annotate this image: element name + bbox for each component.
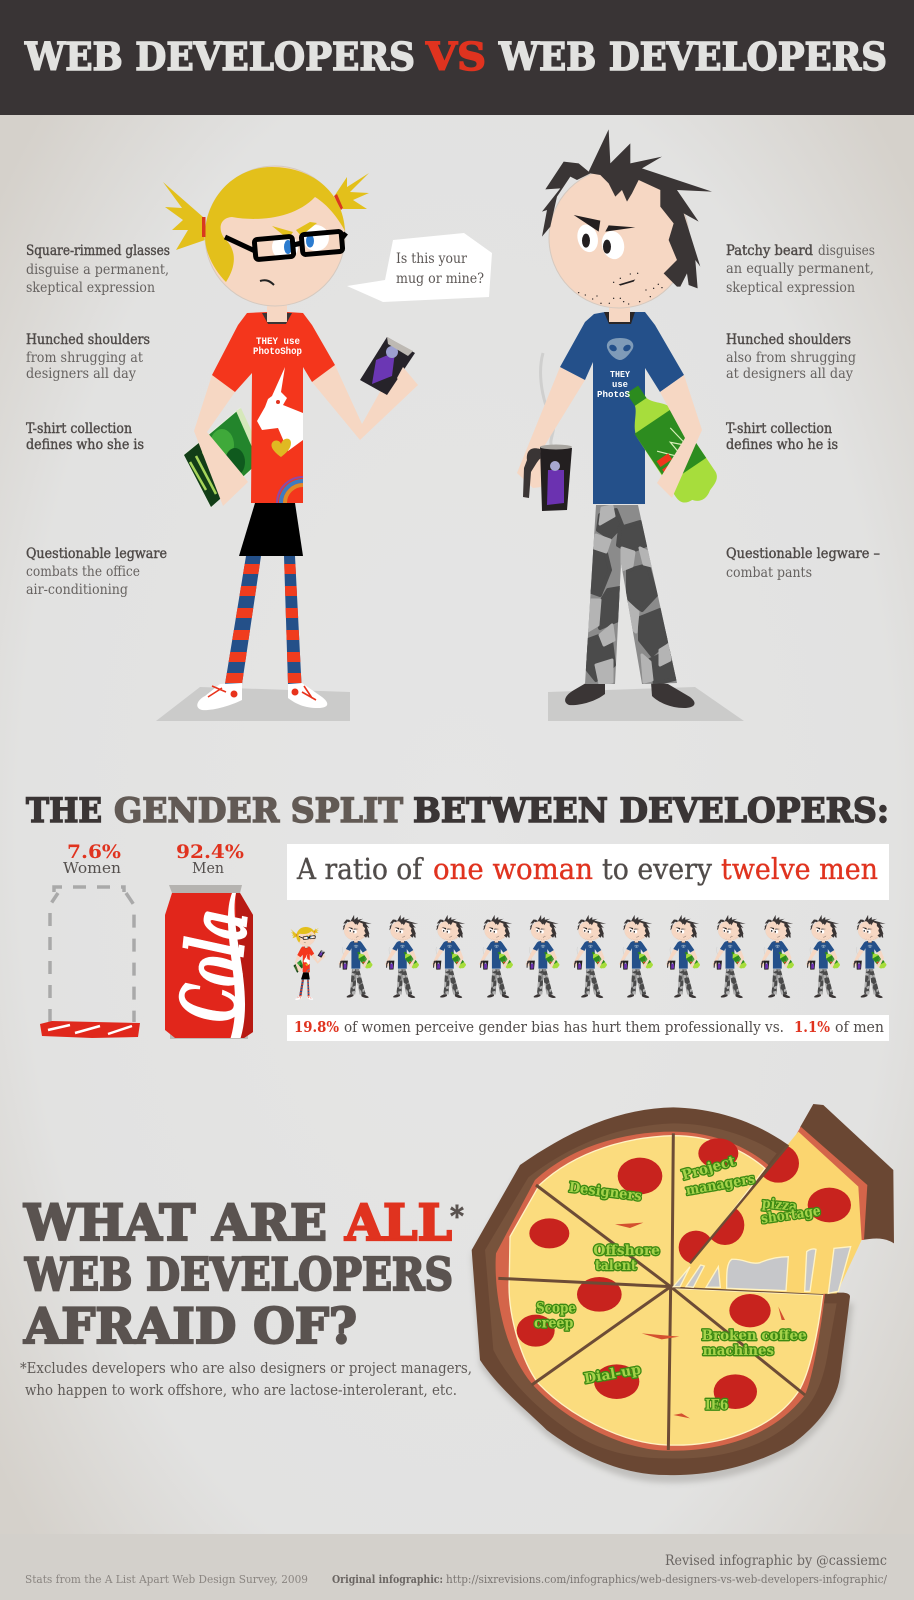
annotations: designer-like developer: from shrugging at	[26, 350, 144, 366]
gender bias stat	[287, 1015, 889, 1041]
pepperoni on pizza	[517, 1138, 771, 1409]
section heading: gender split	[26, 791, 889, 831]
women percentage: 7.6%	[67, 841, 121, 863]
girl left arm	[194, 375, 248, 506]
boy steam	[541, 353, 554, 447]
pictogram row: twelve men	[338, 915, 888, 998]
pizza labels: Project	[680, 1153, 738, 1184]
boy neck	[604, 300, 635, 324]
bubble text: Is this your	[396, 251, 467, 267]
pizza chart	[472, 1104, 894, 1483]
footnote: *Excludes developers who are also designers or project managers,	[20, 1361, 472, 1377]
alien on shirt	[607, 338, 633, 360]
annotations: designer-like developer: defines who she is	[26, 437, 144, 453]
boy shirt text	[597, 369, 630, 400]
annotations: developer: Questionable legware –	[726, 546, 880, 562]
section heading: fears	[23, 1193, 464, 1355]
ratio banner	[287, 844, 889, 900]
bubble text: mug or mine?	[396, 271, 484, 287]
pizza labels: creep	[534, 1315, 574, 1331]
pizza shadow	[472, 1113, 853, 1483]
pulled slice sauce	[796, 1127, 867, 1240]
annotations: designer-like developer: Square-rimmed glasses	[26, 243, 170, 259]
annotations: developer: disguises	[818, 243, 875, 259]
floor shadow left	[156, 687, 350, 721]
speech bubble	[347, 233, 492, 302]
girl eyes	[272, 222, 329, 260]
ratio banner: A ratio of	[296, 852, 424, 886]
women percentage	[63, 841, 121, 877]
pizza labels: Broken coffee	[702, 1328, 807, 1344]
gold heart	[271, 439, 291, 457]
girl legs	[220, 556, 310, 686]
character: girl developer	[163, 166, 418, 710]
annotations: developer: at designers all day	[726, 366, 853, 382]
boy eyebrows	[574, 215, 635, 232]
slice pepperoni	[706, 1144, 851, 1245]
women percentage: Women	[63, 859, 121, 877]
girl shirt text	[253, 336, 302, 358]
girl glasses	[225, 231, 346, 260]
annotations: developer: defines who he is	[726, 437, 838, 453]
gender bias stat: of women perceive gender bias has hurt them professionally vs.	[344, 1018, 784, 1036]
men percentage	[176, 841, 244, 877]
annotations: designer-like developer: skeptical expression	[26, 280, 155, 296]
girl right arm	[312, 365, 418, 440]
pizza cuts	[498, 1133, 823, 1450]
floor shadow right	[548, 687, 744, 721]
boy shirt text: PhotoS	[597, 389, 630, 400]
pizza sauce	[496, 1132, 825, 1451]
pizza labels: shortage	[760, 1203, 822, 1227]
unicorn on shirt	[257, 367, 303, 451]
annotations: designer-like developer: designers all day	[26, 366, 136, 382]
cola can (men)	[165, 885, 253, 1039]
gender bias stat: of men	[835, 1018, 884, 1036]
section heading: fears: WHAT ARE	[23, 1193, 327, 1252]
girl book	[184, 408, 264, 507]
girl shirt text: THEY use	[256, 336, 300, 348]
boy camo pants	[580, 500, 680, 690]
pizza labels: Scope	[536, 1301, 576, 1317]
annotations: developer: skeptical expression	[726, 280, 855, 296]
footer	[0, 1534, 914, 1600]
annotations: designer-like developer: Hunched shoulders	[26, 332, 150, 348]
pizza labels	[534, 1153, 822, 1413]
character: male developer	[517, 129, 724, 708]
pulled slice crust	[800, 1104, 894, 1243]
annotations: developer: also from shrugging	[726, 350, 856, 366]
title	[24, 34, 887, 79]
title: WEB DEVELOPERS	[498, 34, 887, 79]
girl right shoe	[288, 683, 327, 708]
annotations: designer-like developer: Questionable legware	[26, 546, 167, 562]
annotations: developer: an equally permanent,	[726, 261, 874, 277]
girl face	[205, 166, 345, 306]
pizza labels: managers	[685, 1171, 756, 1199]
section heading: gender split: GENDER SPLIT	[114, 791, 403, 831]
slice edge	[690, 1145, 788, 1263]
title: WEB DEVELOPERS	[24, 34, 415, 79]
crushed can	[40, 1021, 140, 1038]
credit: revised: Revised infographic by @cassiemc	[665, 1553, 887, 1569]
pizza crust	[472, 1107, 850, 1475]
boy cup	[523, 444, 572, 511]
bubble text	[396, 251, 484, 287]
pizza cheese	[509, 1136, 823, 1445]
girl hair cap	[205, 167, 345, 282]
boy bottle	[612, 377, 724, 511]
boy t-shirt	[560, 312, 684, 504]
ratio banner: one woman	[433, 852, 593, 886]
footnote: who happen to work offshore, who are lactose-interolerant, etc.	[25, 1383, 457, 1399]
pizza labels: IE6	[705, 1397, 728, 1413]
annotations: developer: Hunched shoulders	[726, 332, 851, 348]
crust highlight	[485, 1123, 837, 1459]
section heading: fears: ALL	[344, 1193, 452, 1252]
girl mouth	[260, 280, 274, 285]
section heading: gender split: BETWEEN DEVELOPERS:	[413, 791, 889, 831]
pizza labels: Designers	[568, 1180, 643, 1205]
rainbow	[277, 477, 303, 503]
annotations: designer-like developer: combats the office	[26, 564, 140, 580]
boy shirt text: THEY	[610, 369, 630, 380]
boy eyes	[574, 222, 627, 262]
girl hair ties	[202, 194, 343, 237]
cheese strings gaps	[673, 1247, 851, 1293]
pizza labels: talent	[595, 1258, 637, 1274]
annotations: developer: T-shirt collection	[726, 421, 832, 437]
gender bias stat: 19.8%	[294, 1018, 339, 1036]
men percentage: 92.4%	[176, 841, 244, 863]
ratio banner: twelve men	[721, 852, 878, 886]
girl hair pigtails	[163, 173, 369, 250]
gender bias stat: 1.1%	[794, 1018, 830, 1036]
annotations: designer-like developer	[26, 243, 170, 598]
annotations: designer-like developer: disguise a permanent,	[26, 262, 169, 278]
boy stubble	[578, 273, 663, 305]
annotations: developer: Patchy beard	[726, 243, 813, 259]
credit: source: Stats from the A List Apart Web Design Survey, 2009	[25, 1572, 308, 1586]
men percentage: Men	[192, 859, 224, 877]
section heading: gender split: THE	[26, 791, 102, 831]
empty dashed can (women)	[40, 887, 140, 1038]
title: VS	[425, 34, 486, 79]
can logo: Cola	[161, 905, 267, 1026]
boy mouth	[619, 279, 635, 286]
pictogram row: one woman	[291, 927, 326, 1000]
section heading: fears: *	[450, 1200, 464, 1233]
annotations: developer: combat pants	[726, 565, 812, 581]
pizza labels: pizza	[761, 1195, 798, 1215]
boy hair	[542, 129, 712, 305]
boy face	[549, 168, 689, 308]
girl left shoe	[197, 683, 242, 710]
section heading: fears: WEB DEVELOPERS	[24, 1248, 453, 1301]
annotations: developer	[726, 243, 880, 581]
boy shirt text: use	[612, 379, 628, 390]
pizza labels: machines	[703, 1343, 774, 1359]
pizza cheese marks	[615, 1223, 785, 1418]
annotations: designer-like developer: air-conditioning	[26, 582, 128, 598]
girl skirt	[239, 503, 303, 556]
pulled slice cheese	[673, 1132, 862, 1294]
boy right arm	[657, 375, 702, 498]
header band	[0, 0, 914, 115]
pizza labels: Dial-up	[583, 1362, 642, 1387]
boy shoes	[565, 682, 695, 708]
credit: original: Original infographic:	[332, 1572, 443, 1586]
girl shirt text: PhotoShop	[253, 346, 302, 358]
girl t-shirt	[212, 312, 335, 503]
annotations: designer-like developer: T-shirt collection	[26, 421, 132, 437]
girl neck	[262, 296, 292, 324]
footnote	[20, 1361, 472, 1399]
ratio banner: to every	[602, 852, 713, 886]
boy left arm	[517, 367, 585, 488]
pizza labels: Offshore	[593, 1243, 660, 1259]
section heading: fears: AFRAID OF?	[23, 1297, 357, 1355]
girl mug and hand	[360, 337, 418, 395]
